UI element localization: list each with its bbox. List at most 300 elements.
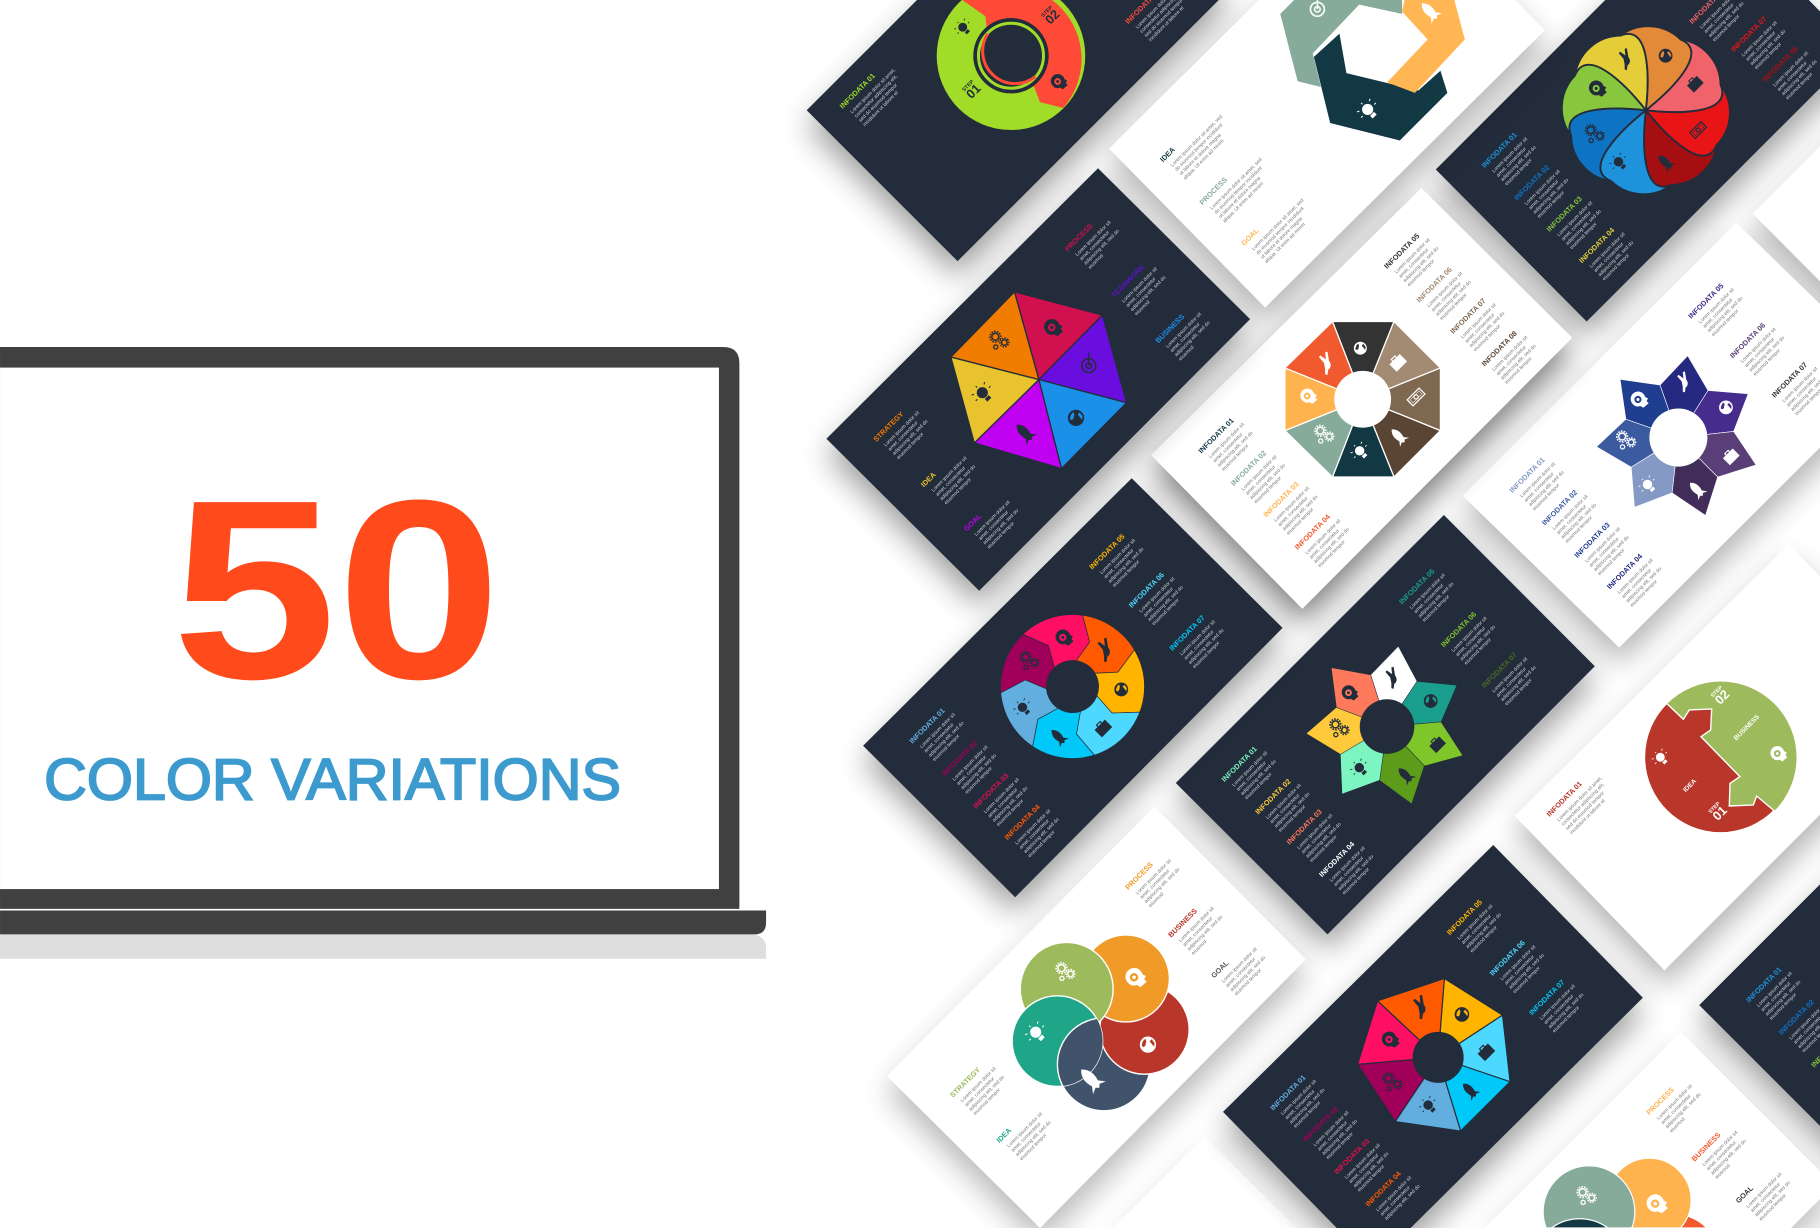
text block: octagon labels: amet, consectetur xyxy=(1398,247,1430,279)
text block: donut seven labels: Lorem ipsum dolor sit xyxy=(1099,537,1137,576)
text block: dark star labels: INFODATA 02 xyxy=(1253,777,1292,816)
text block: star labels: eiusmod tempor xyxy=(1532,482,1562,512)
text block: flower labels: adipiscing elit, sed do xyxy=(1143,867,1181,905)
text block: hexagon labels: ut labore et dolore magna xyxy=(1218,175,1262,220)
laptop lid xyxy=(0,347,739,909)
text block: heptagon labels: Lorem ipsum dolor sit xyxy=(1312,1110,1351,1148)
text block: flower labels: BUSINESS xyxy=(1166,906,1199,939)
text block: spiral labels xyxy=(1480,0,1820,285)
chart: green and red donut xyxy=(937,0,1085,130)
text: step 02: 02 xyxy=(1042,7,1063,27)
text: step 01: STEP xyxy=(961,79,976,93)
text block: octagon labels: Lorem ipsum dolor sit xyxy=(1208,421,1246,460)
text block: donut seven labels: amet, consectetur xyxy=(987,787,1020,819)
text block: spiral labels: INFODATA 01 xyxy=(1480,130,1519,170)
text block: octagon labels: adipiscing elit, sed do xyxy=(1313,527,1351,565)
panel: dark slide seven segment donut xyxy=(863,478,1283,897)
text block: donut seven labels: amet, consectetur xyxy=(923,722,956,754)
text block: star labels: INFODATA 07 xyxy=(1770,360,1809,400)
text block: octagon labels: amet, consectetur xyxy=(1495,344,1528,377)
text block: labels: amet, consectetur xyxy=(1750,1181,1782,1214)
icon: bulb xyxy=(1649,746,1672,769)
text block: hexagon pie labels: Lorem ipsum dolor sit xyxy=(883,410,921,448)
text block: dark star labels: Lorem ipsum dolor sit xyxy=(1265,782,1303,821)
laptop base xyxy=(0,911,766,934)
text block: labels: eiusmod tempor xyxy=(1758,1193,1788,1222)
icons: heptagon xyxy=(1378,993,1495,1117)
text block: dark star labels: INFODATA 01 xyxy=(1220,744,1259,784)
text block: donut labels: incididunt ut labore et xyxy=(862,90,900,128)
text block: octagon labels: Lorem ipsum dolor sit xyxy=(1304,518,1343,556)
panel: dark slide heptagon xyxy=(1223,845,1643,1228)
text block: heptagon labels: amet, consectetur xyxy=(1317,1120,1349,1152)
text block: octagon labels: Lorem ipsum dolor sit xyxy=(1240,454,1279,492)
text block: octagon labels: amet, consectetur xyxy=(1464,312,1497,344)
text block: dark star labels: adipiscing elit, sed do xyxy=(1305,821,1343,859)
text block: heptagon labels: Lorem ipsum dolor sit xyxy=(1280,1078,1318,1117)
icon: head xyxy=(1643,1191,1670,1218)
panel: white slide bottom right circles xyxy=(1485,1032,1820,1228)
text block: hexagon pie labels: eiusmod tempor xyxy=(896,431,926,461)
text block: star labels: Lorem ipsum dolor sit xyxy=(1781,366,1820,404)
text block: hexagon labels: Lorem ipsum dolor sit amet, sed xyxy=(1170,114,1224,168)
text block: star labels: amet, consectetur xyxy=(1786,376,1818,408)
text block: flower labels: STRATEGY xyxy=(948,1065,982,1099)
text block: octagon labels: eiusmod tempor xyxy=(1473,323,1502,353)
text block: octagon labels: eiusmod tempor xyxy=(1504,356,1534,386)
text block: heptagon labels xyxy=(1268,894,1590,1224)
panel: dark slide seven point star xyxy=(1176,515,1595,934)
text block: hexagon pie labels: eiusmod xyxy=(1087,253,1105,271)
text block: flower labels: amet, consectetur xyxy=(1225,956,1257,989)
text block: donut seven labels: amet, consectetur xyxy=(956,754,988,787)
text block: donut seven labels: INFODATA 07 xyxy=(1167,613,1207,653)
text block: spiral labels: amet, consectetur xyxy=(1560,210,1593,242)
text block: dark star labels: INFODATA 06 xyxy=(1439,610,1478,649)
panel: dark slide spiral xyxy=(1436,0,1820,322)
text block: hexagon pie labels: IDEA xyxy=(919,470,938,489)
text block: flower labels: Lorem ipsum dolor sit xyxy=(1006,1111,1044,1149)
text block: spiral labels: eiusmod tempor xyxy=(1601,252,1631,282)
text block: infodata 01: consectetur adipiscing elit, xyxy=(1560,782,1606,827)
text block: dark star labels: eiusmod tempor xyxy=(1244,771,1274,801)
text block: star labels: eiusmod tempor xyxy=(1752,348,1782,377)
text block: spiral labels: Lorem ipsum dolor sit xyxy=(1772,50,1810,88)
text block: hexagon pie labels: amet, consectetur xyxy=(935,465,967,498)
panel: white slide octagon xyxy=(1151,188,1572,609)
text block: donut labels: incididunt ut labore et xyxy=(1148,5,1186,43)
text block: dark star labels: adipiscing elit, sed do xyxy=(1500,665,1538,703)
text block: star labels: Lorem ipsum dolor sit xyxy=(1698,287,1736,325)
icons: hexagon xyxy=(968,316,1100,445)
text: step 02: 02 xyxy=(1712,687,1732,707)
panel: white slide hexagon arrows xyxy=(1109,0,1545,308)
text block: flower labels: IDEA xyxy=(994,1125,1014,1145)
text block: hexagon pie labels: eiusmod tempor xyxy=(943,476,973,506)
text block: labels: adipiscing elit, sed do xyxy=(1754,1180,1792,1218)
text block: hexagon pie labels: adipiscing elit, sed do xyxy=(939,464,977,502)
text block: flower labels: adipiscing elit, sed do xyxy=(1186,914,1224,952)
text block: hexagon pie labels: amet, consectetur xyxy=(1125,276,1158,308)
text block: star labels: INFODATA 02 xyxy=(1540,488,1579,527)
text block: hexagon pie labels: amet, consectetur xyxy=(1079,230,1111,262)
text block: hexagon labels: do eiusmod tempor incididunt xyxy=(1213,165,1264,216)
text block: hexagon labels: aliqua. Ut enim ad minim xyxy=(1182,138,1225,181)
chart: overlapping flower circles xyxy=(1012,935,1189,1111)
text block: hexagon pie labels: amet, consectetur xyxy=(978,509,1010,542)
text block: dark star labels: adipiscing elit, sed do xyxy=(1273,791,1311,829)
text block: dark star labels: amet, consectetur xyxy=(1300,823,1333,855)
text block: donut seven labels: eiusmod tempor xyxy=(1112,559,1141,589)
text block: octagon labels: INFODATA 05 xyxy=(1382,231,1421,271)
text block: donut seven labels: adipiscing elit, sed do xyxy=(1147,585,1185,623)
text block: hexagon labels: do eiusmod tempor incididunt xyxy=(1255,206,1306,256)
text block: octagon labels: INFODATA 03 xyxy=(1261,480,1301,519)
laptop mockup xyxy=(0,347,766,959)
text block: donut seven labels: eiusmod tempor xyxy=(996,798,1025,828)
chart: seven segment donut xyxy=(986,596,1163,772)
text block: heptagon labels: amet, consectetur xyxy=(1379,1185,1412,1217)
text block: star labels: Lorem ipsum dolor sit xyxy=(1617,557,1655,596)
text block: hexagon labels: ut labore et dolore magna xyxy=(1178,132,1223,177)
text block: dark star labels: amet, consectetur xyxy=(1235,760,1268,792)
chart: octagon ring xyxy=(1285,322,1440,477)
text block: octagon labels: amet, consectetur xyxy=(1245,464,1277,497)
text block: octagon labels: adipiscing elit, sed do xyxy=(1435,279,1473,317)
text block: dark star labels: eiusmod tempor xyxy=(1504,677,1534,707)
text block: spiral labels: eiusmod tempor xyxy=(1785,71,1815,101)
text block: dark star labels: adipiscing elit, sed do xyxy=(1337,854,1375,892)
text block: spiral labels: amet, consectetur xyxy=(1776,60,1809,93)
panel: dark slide two step donut xyxy=(807,0,1229,261)
icons: flower xyxy=(1022,960,1159,1094)
text block: spiral labels: eiusmod tempor xyxy=(1712,13,1741,43)
text block: corner labels: amet, consectetur xyxy=(1760,981,1793,1013)
text block: spiral labels: Lorem ipsum dolor sit xyxy=(1491,136,1530,174)
text block: heptagon labels: Lorem ipsum dolor sit xyxy=(1499,944,1538,982)
text block: corner labels: Lorem ipsum dolor sit xyxy=(1756,970,1794,1009)
text block: hexagon labels: IDEA xyxy=(1158,145,1177,164)
text block: spiral labels: amet, consectetur xyxy=(1593,241,1625,274)
icon: head xyxy=(1048,71,1070,93)
text block: hexagon pie labels: PROCESS xyxy=(1063,222,1095,253)
text block: hexagon labels: Lorem ipsum dolor sit amet, sed xyxy=(1251,197,1305,252)
text block: dark star labels: eiusmod tempor xyxy=(1422,594,1451,623)
text block: octagon labels: amet, consectetur xyxy=(1309,528,1341,560)
text block: octagon labels: eiusmod tempor xyxy=(1439,292,1469,322)
panel: far right white slide xyxy=(1753,0,1820,366)
text block: dark star labels: eiusmod tempor xyxy=(1463,637,1493,666)
text block: flower labels: amet, consectetur xyxy=(1010,1121,1043,1153)
text block: octagon labels: eiusmod tempor xyxy=(1406,258,1436,288)
text block: star labels: Lorem ipsum dolor sit xyxy=(1584,526,1622,564)
text block: spiral labels: INFODATA 08 xyxy=(1760,45,1800,84)
text block: labels: Lorem ipsum dolor sit xyxy=(1701,1129,1740,1168)
text block: star labels: Lorem ipsum dolor sit xyxy=(1552,493,1590,532)
text block: hexagon pie labels: adipiscing elit, sed do xyxy=(1174,320,1212,358)
text block: donut labels: sed do eiusmod tempor xyxy=(858,82,899,124)
text block: star labels: amet, consectetur xyxy=(1523,471,1556,503)
text block: flower labels: GOAL xyxy=(1209,958,1231,980)
icons: donut xyxy=(1011,626,1131,747)
text block: hexagon labels: PROCESS xyxy=(1198,175,1229,207)
text block: labels: amet, consectetur xyxy=(1660,1093,1693,1126)
text block: octagon labels: Lorem ipsum dolor sit xyxy=(1491,334,1530,373)
text block: heptagon labels: amet, consectetur xyxy=(1504,954,1536,986)
text block: donut seven labels: adipiscing elit, sed do xyxy=(1023,817,1061,855)
text block: donut seven labels: adipiscing elit, sed do xyxy=(960,753,998,791)
text block: star labels: INFODATA 05 xyxy=(1686,281,1725,321)
text block: flower labels: eiusmod tempor xyxy=(1019,1132,1049,1162)
text block: hexagon pie labels: Lorem ipsum dolor sit xyxy=(1121,266,1159,304)
text block: hexagon pie labels: adipiscing elit, sed do xyxy=(891,419,930,457)
laptop screen xyxy=(0,368,719,889)
text block: donut seven labels: INFODATA 05 xyxy=(1087,532,1127,571)
text block: star labels: adipiscing elit, sed do xyxy=(1593,535,1631,573)
text block: octagon labels: adipiscing elit, sed do xyxy=(1281,494,1320,532)
text block: labels: BUSINESS xyxy=(1690,1130,1723,1163)
text block: hexagon labels: do eiusmod tempor incididunt xyxy=(1174,122,1225,173)
text block: flower labels xyxy=(948,849,1272,1164)
icon: head xyxy=(1768,743,1789,765)
text block: dark star labels: eiusmod tempor xyxy=(1278,804,1307,834)
text block: labels: Lorem ipsum dolor sit xyxy=(1656,1083,1694,1121)
text block: hexagon pie labels: BUSINESS xyxy=(1153,312,1186,345)
text block: heptagon labels: eiusmod tempor xyxy=(1293,1100,1322,1130)
chart: hexagon pie xyxy=(951,292,1127,469)
text block: donut seven labels: Lorem ipsum dolor sit xyxy=(1014,808,1052,846)
text block: octagon labels: INFODATA 08 xyxy=(1480,329,1519,368)
panel: white slide arrow circle xyxy=(1515,544,1820,970)
text block: labels: GOAL xyxy=(1734,1183,1755,1205)
panel: white slide under heptagon xyxy=(1113,1136,1297,1228)
text block: heptagon labels: adipiscing elit, sed do xyxy=(1508,952,1546,991)
text block: donut seven labels: INFODATA 04 xyxy=(1003,802,1042,842)
text block: flower labels: Lorem ipsum dolor sit xyxy=(960,1066,998,1104)
text block: spiral labels: amet, consectetur xyxy=(1528,178,1560,211)
text block: donut seven labels: INFODATA 03 xyxy=(971,771,1010,810)
text block: spiral labels: adipiscing elit, sed do xyxy=(1500,145,1538,183)
text block: infodata 01: Lorem ipsum dolor sit amet, xyxy=(1556,775,1604,823)
text block: donut seven labels: amet, consectetur xyxy=(1183,629,1216,661)
text block: dark star labels: adipiscing elit, sed do xyxy=(1459,624,1497,662)
text block: star labels: adipiscing elit, sed do xyxy=(1706,296,1744,334)
text block: spiral labels: adipiscing elit, sed do xyxy=(1532,177,1570,215)
text block: dark star labels: Lorem ipsum dolor sit xyxy=(1329,845,1367,883)
text block: spiral labels: adipiscing elit, sed do xyxy=(1597,240,1635,278)
icons: star xyxy=(1612,370,1740,500)
text block: donut labels: INFODATA 01 xyxy=(838,71,877,111)
text block: octagon labels: INFODATA 01 xyxy=(1196,416,1236,455)
text block: hexagon pie labels: eiusmod xyxy=(1178,345,1196,362)
text block: donut seven labels: Lorem ipsum dolor sit xyxy=(951,744,990,782)
text block: hexagon pie labels: Lorem ipsum dolor sit xyxy=(1165,311,1203,349)
text block: dark star labels: Lorem ipsum dolor sit xyxy=(1231,750,1270,788)
chart: overlapping circles xyxy=(1543,1158,1707,1228)
text block: heptagon labels: eiusmod tempor xyxy=(1469,924,1499,954)
icon: gears xyxy=(1572,1184,1598,1209)
text block: dark star labels: INFODATA 07 xyxy=(1480,650,1519,690)
text block: star labels: eiusmod tempor xyxy=(1564,515,1594,545)
text block: spiral labels: eiusmod tempor xyxy=(1569,221,1599,251)
text block: flower labels: amet, consectetur xyxy=(964,1076,996,1108)
text block: hexagon pie labels: Lorem ipsum dolor sit xyxy=(1074,219,1113,258)
text block: donut seven labels: eiusmod tempor xyxy=(1151,597,1181,627)
text block: star labels: INFODATA 03 xyxy=(1572,520,1612,560)
text block: heptagon labels: adipiscing elit, sed do xyxy=(1321,1118,1359,1157)
text block: star labels: amet, consectetur xyxy=(1621,567,1653,600)
text block: labels: eiusmod xyxy=(1714,1163,1732,1181)
text block: donut seven labels: Lorem ipsum dolor sit xyxy=(1138,576,1177,614)
text block: flower labels: Lorem ipsum dolor sit xyxy=(1178,905,1216,944)
chart: three arm hexagon xyxy=(1280,0,1465,140)
text block: hexagon labels xyxy=(1158,105,1318,267)
text block: octagon labels xyxy=(1196,228,1542,571)
text block: labels: PROCESS xyxy=(1644,1085,1676,1117)
text block: spiral labels: eiusmod tempor xyxy=(1504,157,1534,187)
text block: flower labels: Lorem ipsum dolor sit xyxy=(1221,946,1259,984)
text block: donut seven labels: adipiscing elit, sed do xyxy=(927,720,966,758)
panel: dark slide hexagon pie xyxy=(826,168,1250,591)
text block: heptagon labels: amet, consectetur xyxy=(1348,1152,1381,1185)
text block: hexagon labels: ut labore et dolore magna xyxy=(1259,216,1304,261)
text block: labels: adipiscing elit, sed do xyxy=(1664,1092,1703,1130)
text block: spiral labels: INFODATA 02 xyxy=(1512,163,1551,202)
text block: spiral labels: Lorem ipsum dolor sit xyxy=(1524,168,1562,207)
text: step 02: STEP xyxy=(1710,685,1724,699)
text block: star labels: INFODATA 04 xyxy=(1605,551,1645,591)
text block: spiral labels: INFODATA 07 xyxy=(1729,14,1768,54)
text: step 01: 01 xyxy=(963,81,984,101)
text block: octagon labels: eiusmod tempor xyxy=(1286,507,1315,536)
text block: donut seven labels xyxy=(907,528,1230,862)
text block: dark star labels: INFODATA 05 xyxy=(1397,567,1436,606)
text block: hexagon labels: GOAL xyxy=(1239,226,1261,247)
text block: hexagon pie labels: STRATEGY xyxy=(871,409,906,444)
text block: star labels: amet, consectetur xyxy=(1588,536,1621,568)
text block: heptagon labels: INFODATA 04 xyxy=(1364,1169,1403,1209)
text block: star labels: amet, consectetur xyxy=(1556,503,1588,536)
text block: donut seven labels: adipiscing elit, sed do xyxy=(1107,546,1145,584)
number: 50: 50 xyxy=(172,448,501,733)
text block: spiral labels: adipiscing elit, sed do xyxy=(1781,59,1819,97)
text: step 01: 01 xyxy=(1709,803,1730,823)
text block: heptagon labels: Lorem ipsum dolor sit xyxy=(1344,1142,1382,1181)
text block: heptagon labels: INFODATA 05 xyxy=(1445,898,1484,937)
text: business: BUSINESS xyxy=(1733,713,1762,742)
text block: donut seven labels: INFODATA 01 xyxy=(907,706,947,745)
panel: white slide seven point star xyxy=(1462,223,1820,648)
text block: dark star labels: INFODATA 04 xyxy=(1317,839,1357,879)
text block: spiral labels: eiusmod tempor xyxy=(1753,41,1783,71)
text block: donut labels xyxy=(838,0,1195,130)
text block: octagon labels: Lorem ipsum dolor sit xyxy=(1460,302,1498,340)
text block: donut seven labels: eiusmod tempor xyxy=(932,733,961,763)
text block: hexagon pie labels: GOAL xyxy=(962,511,984,533)
text block: spiral labels: amet, consectetur xyxy=(1703,2,1736,35)
text block: hexagon pie labels: amet, consectetur xyxy=(1169,321,1202,354)
text block: octagon labels: eiusmod tempor xyxy=(1221,443,1250,473)
text block: donut labels: consectetur adipiscing elit, xyxy=(854,74,899,119)
text block: octagon labels: INFODATA 04 xyxy=(1293,512,1333,552)
text block: donut seven labels: Lorem ipsum dolor sit xyxy=(1179,619,1217,657)
text block: star labels: amet, consectetur xyxy=(1744,336,1776,369)
text block: spiral labels: Lorem ipsum dolor sit xyxy=(1556,200,1595,238)
text block: heptagon labels: adipiscing elit, sed do xyxy=(1465,912,1503,950)
icon: bulb xyxy=(1354,95,1382,124)
text block: flower labels: eiusmod tempor xyxy=(1234,967,1263,997)
text block: donut seven labels: eiusmod tempor xyxy=(1027,829,1057,859)
chart: seven point star blue purple xyxy=(1594,353,1764,523)
text block: corner labels: INFODATA 02 xyxy=(1777,998,1816,1037)
chart: heptagon ring xyxy=(1358,978,1510,1131)
text block: hexagon pie labels: Lorem ipsum dolor sit xyxy=(973,499,1012,538)
text block: star labels: Lorem ipsum dolor sit xyxy=(1740,326,1778,365)
heading: color variations: COLOR VARIATIONS xyxy=(44,748,621,813)
text block: spiral labels: adipiscing elit, sed do xyxy=(1707,1,1746,39)
text block: heptagon labels: amet, consectetur xyxy=(1284,1088,1317,1121)
text block: heptagon labels: INFODATA 06 xyxy=(1488,938,1527,978)
text block: dark star labels: eiusmod tempor xyxy=(1309,834,1339,864)
text block: octagon labels: amet, consectetur xyxy=(1430,281,1463,313)
text block: corner labels: eiusmod tempor xyxy=(1769,992,1798,1022)
text block: donut seven labels: eiusmod tempor xyxy=(1192,640,1221,670)
text block: dark star labels: INFODATA 03 xyxy=(1285,807,1324,846)
icon: gear xyxy=(1306,0,1329,19)
text block: corner labels: INFODATA 01 xyxy=(1744,965,1783,1004)
text: step 02: STEP xyxy=(1040,5,1055,19)
icon: bulb xyxy=(952,16,974,39)
text block: spiral labels: adipiscing elit, sed do xyxy=(1749,29,1787,67)
text block: star labels: adipiscing elit, sed do xyxy=(1748,335,1786,373)
text block: hexagon pie labels: amet, consectetur xyxy=(887,420,920,452)
text block: star labels: eiusmod tempor xyxy=(1629,579,1659,608)
text block: dark star labels: amet, consectetur xyxy=(1269,792,1302,825)
text block: heptagon labels: eiusmod tempor xyxy=(1552,1005,1581,1034)
text block: spiral labels: amet, consectetur xyxy=(1745,30,1777,62)
text block: heptagon labels: eiusmod tempor xyxy=(1357,1164,1386,1193)
text block: star labels: Lorem ipsum dolor sit xyxy=(1519,461,1557,499)
text block: star labels: eiusmod tempor xyxy=(1597,547,1627,577)
text block: heptagon labels: INFODATA 02 xyxy=(1301,1104,1340,1144)
text block: corner labels: adipiscing elit, sed do xyxy=(1764,979,1802,1017)
text block: flower labels: amet, consectetur xyxy=(1182,916,1215,948)
text block: octagon labels: adipiscing elit, sed do xyxy=(1468,311,1506,349)
text: step 01: STEP xyxy=(1708,801,1722,815)
text block: flower labels: eiusmod xyxy=(1148,891,1165,909)
text block: octagon labels: eiusmod tempor xyxy=(1253,475,1283,505)
text block: spiral labels: INFODATA 03 xyxy=(1545,194,1584,234)
text block: star labels: adipiscing elit, sed do xyxy=(1625,566,1663,604)
text block: spiral labels: eiusmod tempor xyxy=(1536,190,1566,220)
text block: hexagon pie labels xyxy=(871,210,1216,553)
text block: dark star labels: Lorem ipsum dolor sit xyxy=(1451,615,1489,654)
text block: heptagon labels: adipiscing elit, sed do xyxy=(1288,1087,1327,1125)
panel: dark slide bottom right corner xyxy=(1699,734,1820,1156)
text block: spiral labels: amet, consectetur xyxy=(1495,146,1528,178)
text block: hexagon pie labels: Lorem ipsum dolor sit xyxy=(931,455,969,493)
text block: infodata 01: INFODATA 01 xyxy=(1545,779,1584,819)
text block: octagon labels: adipiscing elit, sed do xyxy=(1216,430,1255,468)
text block: flower labels: Lorem ipsum dolor sit xyxy=(1135,858,1173,896)
text block: octagon labels: eiusmod tempor xyxy=(1317,539,1347,569)
text block: octagon labels: adipiscing elit, sed do xyxy=(1500,343,1538,381)
text block: labels: Lorem ipsum dolor sit xyxy=(1745,1171,1784,1210)
text block: dark star labels xyxy=(1220,563,1542,899)
text block: labels: eiusmod xyxy=(1669,1116,1686,1134)
text block: dark star labels: Lorem ipsum dolor sit xyxy=(1491,656,1530,694)
text block: heptagon labels: eiusmod tempor xyxy=(1325,1131,1355,1161)
